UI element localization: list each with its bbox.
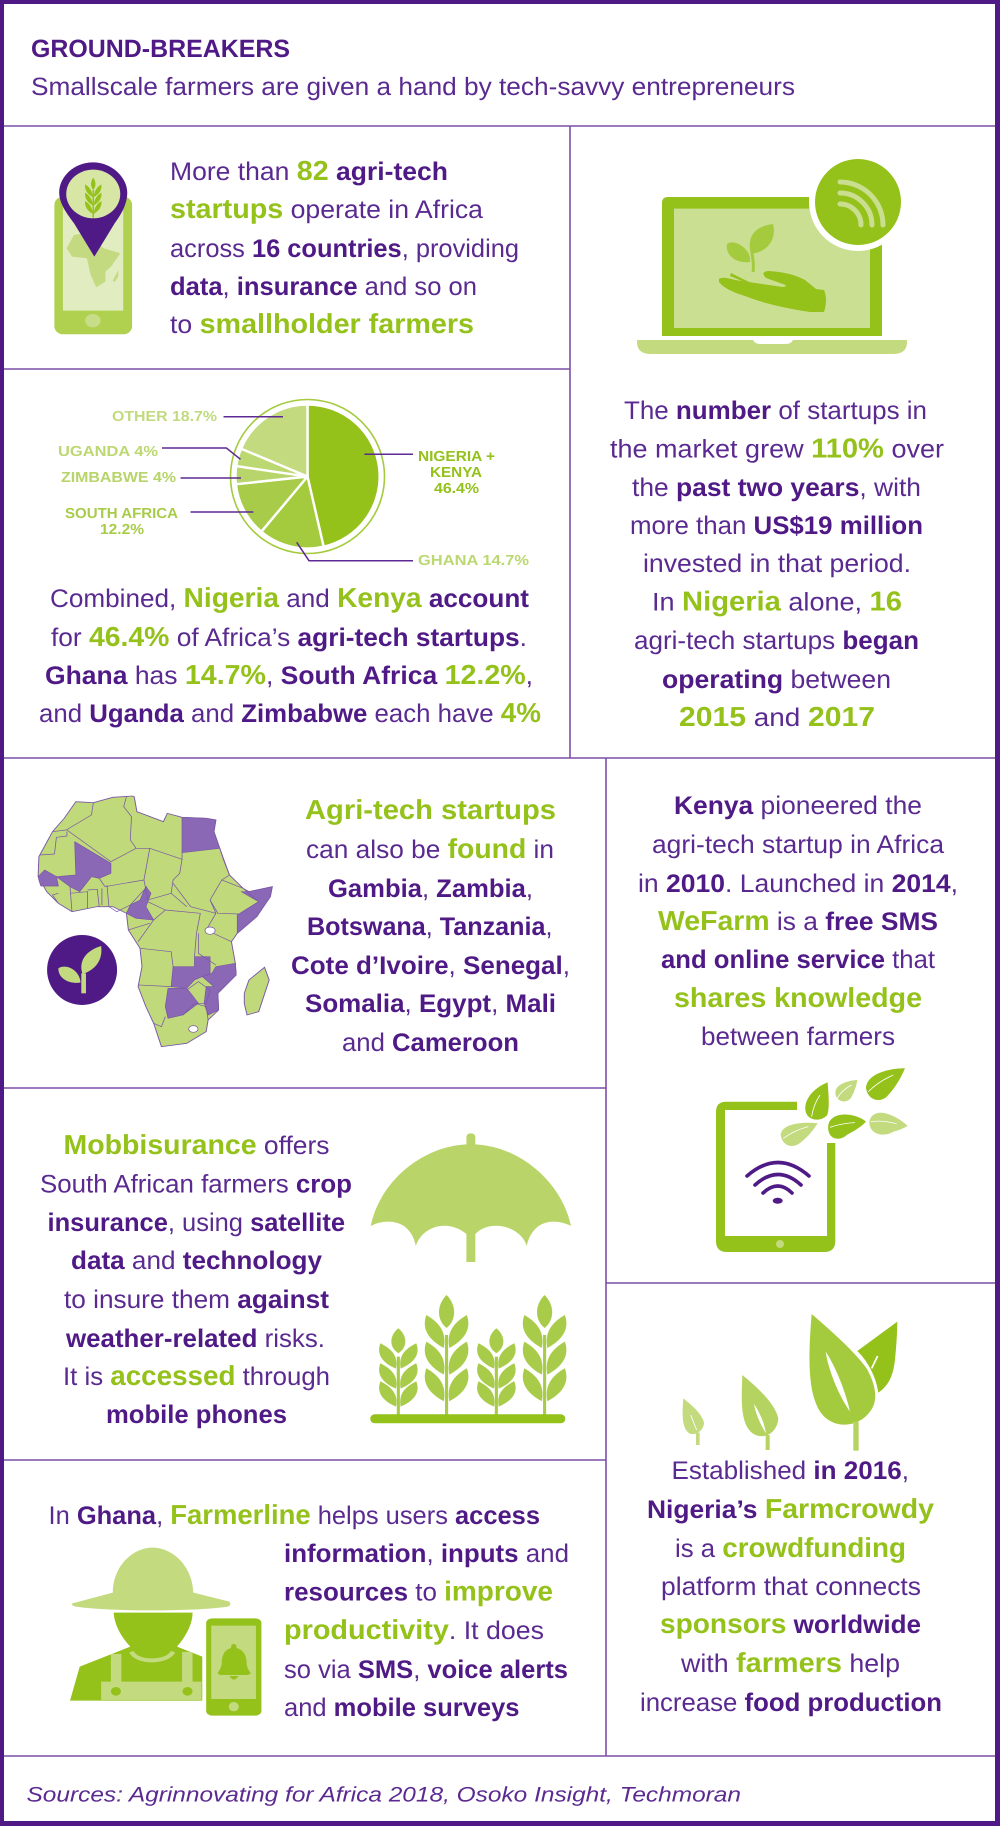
- panel: header: [4, 4, 995, 126]
- text block: WeFarm: shares knowledge: [674, 982, 922, 1013]
- text block: Farmcrowdy: with farmers help: [680, 1647, 900, 1678]
- pie labels: NIGERIA +: [418, 449, 495, 465]
- text block: WeFarm: and online service that: [661, 946, 935, 974]
- text block: growth: the market grew 110% over: [610, 432, 945, 464]
- text block: Farmerline: [48, 1499, 569, 1722]
- text block: Mobbisurance: It is accessed through: [63, 1360, 330, 1391]
- panel: market share pie chart: [4, 370, 570, 757]
- panel: Kenya WeFarm: [607, 759, 995, 1283]
- text block: other countries: [291, 794, 570, 1057]
- text block: combined share: Combined, Nigeria and Kenya account: [50, 582, 530, 613]
- text block: WeFarm: agri-tech startup in Africa: [652, 831, 945, 859]
- text block: combined share: [39, 582, 541, 728]
- text block: WeFarm: [638, 792, 958, 1051]
- text block: other countries: Gambia, Zambia,: [328, 875, 533, 903]
- text block: Farmcrowdy: sponsors worldwide: [660, 1608, 921, 1639]
- pie labels: GHANA 14.7%: [418, 553, 529, 569]
- text block: Farmerline: so via SMS, voice alerts: [284, 1656, 568, 1684]
- icon: phone with location pin: [54, 162, 132, 334]
- pie labels: UGANDA 4%: [58, 444, 158, 460]
- icon: laptop with plant in hand: [637, 153, 907, 354]
- text block: Farmcrowdy: Established in 2016,: [672, 1457, 909, 1485]
- text block: Farmcrowdy: increase food production: [640, 1689, 942, 1717]
- subtitle: Smallscale farmers are given a hand by tech-savvy entrepreneurs: [31, 73, 795, 101]
- text block: Mobbisurance: [40, 1129, 352, 1429]
- panel: market growth: [571, 127, 995, 757]
- icon: tablet with leaves: [716, 1068, 908, 1252]
- text block: growth: operating between: [662, 666, 891, 694]
- text block: growth: more than US$19 million: [630, 512, 923, 540]
- icon: growing leaves: [683, 1314, 897, 1451]
- text block: Farmerline: resources to improve: [284, 1576, 553, 1606]
- icon: farmer with phone: [70, 1548, 261, 1716]
- text block: WeFarm: between farmers: [701, 1023, 895, 1051]
- text block: Mobbisurance: Mobbisurance offers: [64, 1129, 330, 1160]
- text block: Mobbisurance: South African farmers crop: [40, 1170, 352, 1198]
- pie labels: 12.2%: [100, 522, 144, 538]
- pie labels: 46.4%: [434, 481, 479, 497]
- text block: growth: The number of startups in: [624, 397, 927, 425]
- text block: other countries: and Cameroon: [342, 1029, 519, 1057]
- map: Africa: [38, 796, 272, 1047]
- pie labels: KENYA: [430, 465, 483, 481]
- text block: Mobbisurance: weather-related risks.: [65, 1325, 325, 1353]
- text block: other countries: Cote d’Ivoire, Senegal,: [291, 952, 570, 980]
- panel: Mobbisurance: [4, 1089, 606, 1460]
- text block: growth: the past two years, with: [632, 474, 921, 502]
- icon: crops: [370, 1295, 566, 1423]
- text block: 82 startups: startups operate in Africa: [170, 193, 484, 224]
- sources footer: [4, 1757, 995, 1821]
- text block: 82 startups: More than 82 agri-tech: [170, 155, 448, 186]
- pie chart: [230, 400, 384, 554]
- pie labels: OTHER 18.7%: [112, 409, 217, 425]
- pie leader lines: [162, 417, 413, 561]
- text block: growth: In Nigeria alone, 16: [652, 586, 902, 616]
- text block: 82 startups: [170, 155, 519, 339]
- text block: WeFarm: Kenya pioneered the: [674, 792, 922, 820]
- panel: countries map: [4, 759, 606, 1088]
- icon: umbrella: [371, 1133, 571, 1262]
- text block: Farmerline: and mobile surveys: [284, 1694, 520, 1722]
- text block: combined share: Ghana has 14.7%, South Africa 12.2%,: [45, 659, 533, 690]
- pie labels: [58, 409, 529, 569]
- text block: Mobbisurance: data and technology: [71, 1247, 323, 1275]
- sources footer: Sources: Agrinnovating for Africa 2018, Osoko Insight, Techmoran: [26, 1784, 741, 1806]
- text block: Farmcrowdy: is a crowdfunding: [675, 1532, 906, 1563]
- text block: other countries: Agri-tech startups: [305, 794, 556, 825]
- title: GROUND-BREAKERS: [31, 35, 290, 63]
- text block: combined share: and Uganda and Zimbabwe each have 4%: [39, 697, 541, 728]
- text block: WeFarm: in 2010. Launched in 2014,: [638, 870, 958, 898]
- text block: Farmcrowdy: platform that connects: [661, 1573, 921, 1601]
- text block: 82 startups: data, insurance and so on: [170, 273, 477, 301]
- text block: WeFarm: WeFarm is a free SMS: [658, 905, 938, 936]
- text block: Mobbisurance: insurance, using satellite: [48, 1209, 345, 1237]
- text block: 82 startups: to smallholder farmers: [170, 308, 474, 339]
- pie labels: ZIMBABWE 4%: [61, 470, 176, 486]
- text block: other countries: Botswana, Tanzania,: [307, 913, 552, 941]
- text block: other countries: Somalia, Egypt, Mali: [305, 990, 556, 1018]
- text block: Farmerline: productivity . It does: [284, 1614, 544, 1645]
- panel: 82 agri-tech startups: [4, 127, 570, 369]
- text block: Farmcrowdy: [640, 1457, 942, 1717]
- text block: Mobbisurance: mobile phones: [106, 1401, 287, 1429]
- text block: 82 startups: across 16 countries, providing: [170, 235, 519, 263]
- panel: Farmcrowdy: [607, 1284, 995, 1756]
- pie labels: SOUTH AFRICA: [65, 506, 179, 522]
- text block: growth: invested in that period.: [643, 550, 911, 578]
- text block: combined share: for 46.4% of Africa’s agri-tech startups .: [51, 621, 527, 652]
- text block: other countries: can also be found in: [306, 833, 554, 864]
- text block: growth: agri-tech startups began: [634, 627, 919, 655]
- text block: growth: [610, 397, 945, 732]
- panel: Farmerline: [4, 1461, 606, 1756]
- text block: growth: 2015 and 2017: [679, 701, 875, 732]
- text block: Mobbisurance: to insure them against: [64, 1286, 330, 1314]
- icon: sprout in circle: [47, 935, 117, 1005]
- text block: Farmerline: In Ghana, Farmerline helps users access: [48, 1499, 540, 1530]
- text block: Farmerline: information, inputs and: [284, 1540, 569, 1568]
- text block: Farmcrowdy: Nigeria’s Farmcrowdy: [647, 1493, 935, 1524]
